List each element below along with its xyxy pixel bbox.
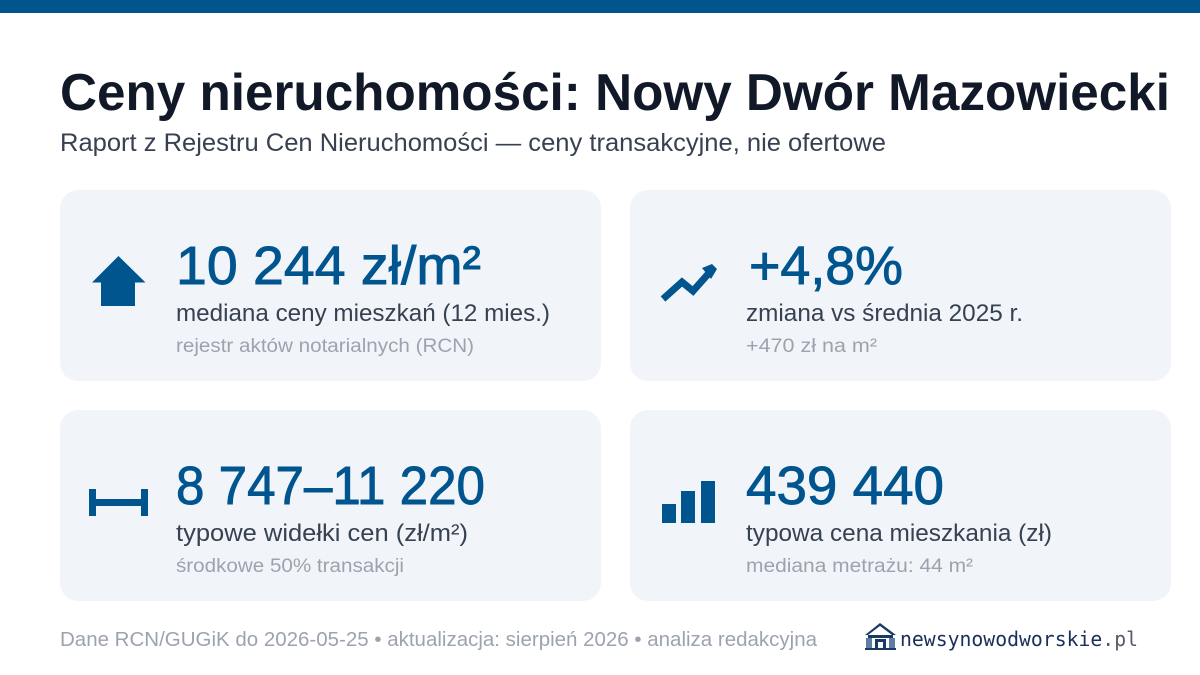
note: median price source: rejestr aktów notarialnych (RCN) — [176, 336, 474, 357]
note: median floor area: mediana metrażu: 44 m² — [746, 556, 973, 577]
panel: price change — [630, 190, 1171, 381]
label: typical flat price: typowa cena mieszkania (zł) — [746, 520, 1052, 547]
panel: price range — [60, 410, 601, 601]
icon: rising trend arrow — [663, 264, 717, 299]
label: price range: typowe widełki cen (zł/m²) — [176, 520, 468, 547]
icon: house — [92, 256, 146, 306]
subtitle: Raport z Rejestru Cen Nieruchomości — ceny transakcyjne, nie ofertowe — [60, 129, 886, 157]
value: typical flat price: 439 440 — [746, 456, 944, 516]
top bar — [0, 0, 1200, 13]
note: price range basis: środkowe 50% transakcji — [176, 556, 404, 577]
label: median price: mediana ceny mieszkań (12 mies.) — [176, 300, 550, 327]
title: Ceny nieruchomości: Nowy Dwór Mazowiecki — [60, 64, 1170, 122]
icon: logo building — [865, 623, 896, 650]
logo wordmark: newsynowodworskie.pl — [900, 627, 1138, 651]
value: median price: 10 244 zł/m² — [176, 236, 481, 296]
label: price change: zmiana vs średnia 2025 r. — [746, 300, 1023, 327]
value: price change: +4,8% — [749, 236, 903, 296]
icon: range bracket — [89, 489, 148, 516]
logo — [865, 623, 1138, 651]
note: price change per square metre: +470 zł na m² — [746, 336, 877, 357]
footer source note: Dane RCN/GUGiK do 2026-05-25 • aktualizacja: sierpień 2026 • analiza redakcyjna — [60, 629, 818, 651]
icon: bar chart — [662, 481, 715, 523]
value: price range: 8 747–11 220 — [176, 456, 485, 516]
panel: typical flat price — [630, 410, 1171, 601]
panel: median price — [60, 190, 601, 381]
